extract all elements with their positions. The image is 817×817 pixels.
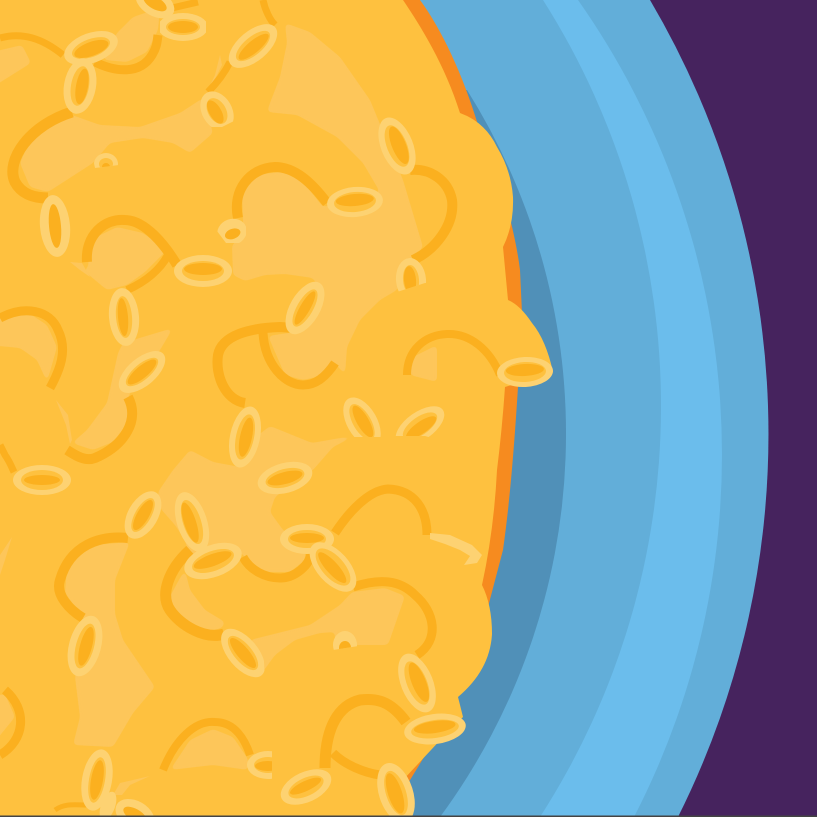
- opening 4: [158, 13, 208, 41]
- opening 9: [174, 255, 232, 287]
- opening 14: [107, 287, 141, 347]
- opening 15: [112, 343, 172, 401]
- opening 12: [326, 185, 384, 219]
- sauce edge: [300, 0, 522, 785]
- opening 32: [391, 648, 443, 718]
- opening 38: [96, 790, 120, 817]
- macaroni openings: [13, 0, 554, 817]
- opening 22: [278, 275, 332, 341]
- macaroni mass: [0, 0, 553, 817]
- opening 6: [200, 91, 234, 127]
- opening 2: [59, 56, 101, 116]
- opening 19: [124, 491, 162, 539]
- opening 25: [396, 406, 444, 437]
- opening 23: [496, 356, 554, 388]
- opening 20: [168, 488, 216, 556]
- opening 7: [94, 153, 118, 168]
- opening 28: [221, 628, 264, 678]
- bottom edge line: [0, 816, 817, 817]
- light cheese slivers: [0, 55, 222, 795]
- macaroni inner curve shadows: [0, 0, 500, 810]
- opening 16: [224, 404, 266, 470]
- light cheese patches: [0, 8, 437, 770]
- opening 1: [60, 24, 122, 72]
- opening 37: [110, 792, 160, 817]
- opening 21: [280, 524, 334, 554]
- opening 26: [179, 536, 247, 586]
- opening 27: [301, 534, 365, 600]
- opening 36: [247, 751, 272, 779]
- opening 13: [396, 258, 426, 292]
- opening 31: [333, 631, 357, 650]
- opening 3: [130, 0, 180, 25]
- opening 11: [371, 112, 423, 180]
- opening 10: [218, 218, 246, 243]
- opening 18: [254, 456, 316, 500]
- opening 8: [37, 194, 73, 258]
- opening 33: [402, 710, 468, 748]
- bowl highlight band: [540, 0, 722, 817]
- opening 34: [275, 762, 337, 812]
- opening 35: [370, 758, 422, 817]
- opening 24: [343, 398, 381, 437]
- opening 39: [430, 533, 482, 565]
- opening 17: [13, 465, 71, 495]
- opening 29: [62, 612, 108, 680]
- opening 5: [221, 16, 285, 76]
- bowl inner shadow: [300, 90, 566, 817]
- opening 30: [77, 747, 117, 813]
